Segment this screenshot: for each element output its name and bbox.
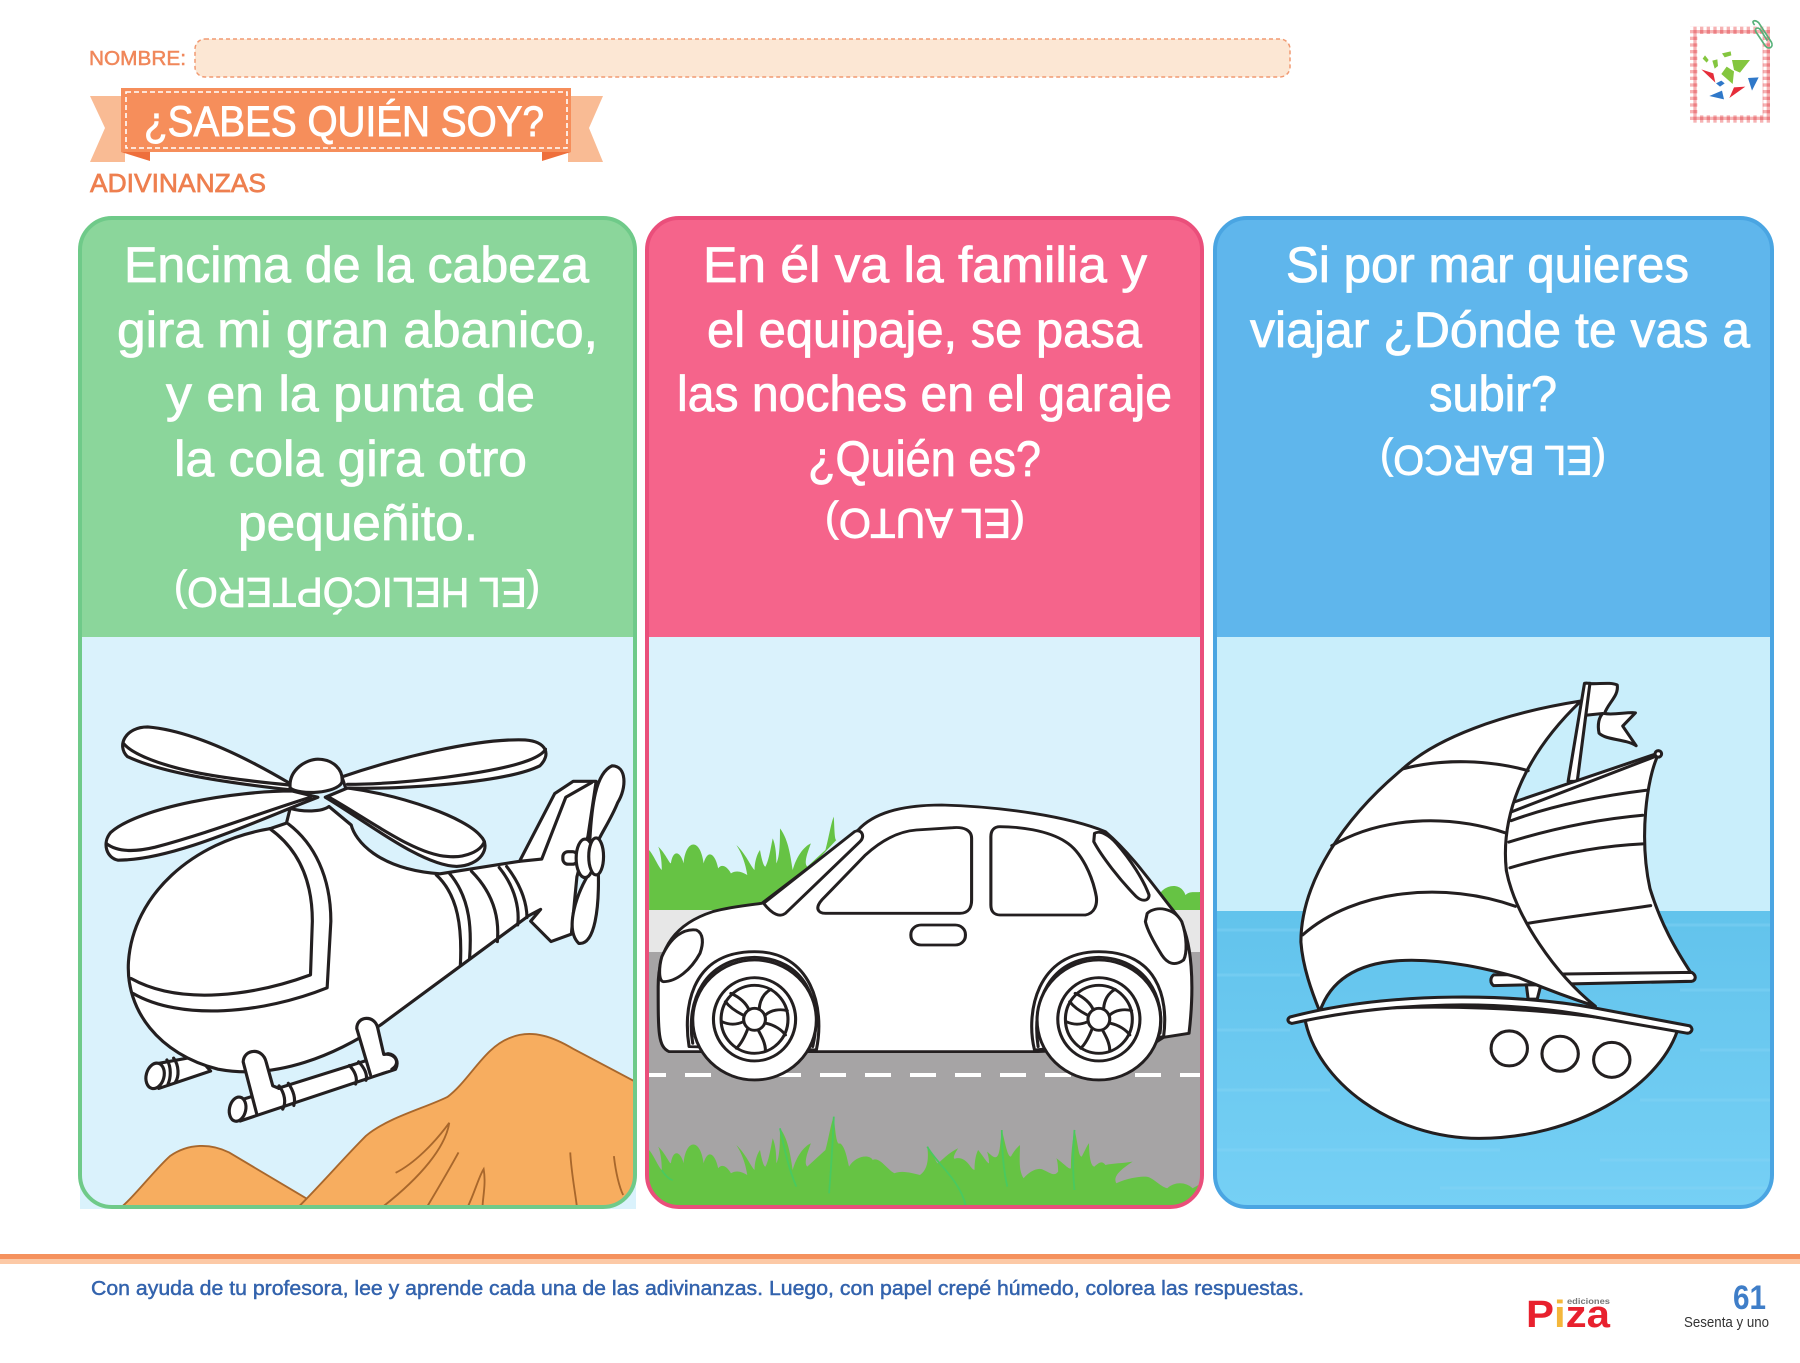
riddle text: y en la punta de (166, 366, 535, 422)
spar knob (1655, 751, 1662, 757)
riddle text: viajar ¿Dónde te vas a (1250, 302, 1750, 358)
boom (1491, 972, 1695, 986)
title banner: ¿SABES QUIÉN SOY? (144, 98, 544, 146)
background grass (649, 817, 836, 910)
front wheel (693, 960, 816, 1080)
riddle text: Si por mar quieres (1286, 237, 1689, 293)
boat drawing (1288, 683, 1695, 1138)
rear wheel (1037, 960, 1161, 1080)
rear arch (1032, 952, 1165, 1050)
tail bands (436, 866, 527, 966)
tail light (1145, 909, 1186, 964)
footer band (0, 1254, 1800, 1264)
panel border (647, 218, 1202, 1207)
panel border (1215, 218, 1772, 1207)
riddle text: las noches en el garaje (677, 366, 1172, 422)
panel border (80, 218, 635, 1207)
mountains (118, 1034, 636, 1210)
main rotor blades (106, 791, 318, 860)
fuselage and tail (128, 781, 596, 1072)
front arch (687, 952, 819, 1050)
page number: 61 (1733, 1279, 1766, 1317)
panel body (647, 218, 1202, 637)
sky and sea scene (1215, 637, 1772, 1211)
panel: helicopter riddle (80, 218, 636, 1210)
riddle text (117, 237, 598, 551)
riddle text: ¿Quién es? (808, 431, 1041, 487)
door handle (911, 925, 965, 945)
riddle text: el equipaje, se pasa (707, 302, 1142, 358)
panel: boat riddle (1215, 218, 1772, 1211)
icon: gingham frame with tangram (1694, 21, 1772, 119)
rotor hub (290, 759, 342, 792)
foreground grass (649, 1117, 1202, 1210)
riddle text: En él va la familia y (703, 237, 1147, 293)
riddle text: pequeñito. (238, 495, 478, 551)
mast (1568, 683, 1590, 781)
riddle text: la cola gira otro (174, 431, 527, 487)
headlight (660, 930, 702, 982)
publisher logo: Piza (1526, 1294, 1611, 1336)
upside-down answer: (EL HELICÓPTERO) (174, 569, 540, 616)
deck rail (1288, 997, 1692, 1033)
riddle text (1250, 237, 1750, 422)
publisher logo: ediciones (1567, 1297, 1611, 1306)
window frame (131, 829, 312, 995)
title banner (90, 88, 603, 162)
subtitle: ADIVINANZAS (90, 168, 266, 198)
rear pillar light (1094, 832, 1149, 900)
name input field (195, 39, 1290, 77)
rear skid (157, 1056, 211, 1088)
hull (1305, 1007, 1677, 1138)
front window (818, 827, 972, 913)
rear window (991, 827, 1097, 915)
flag (1585, 683, 1636, 746)
road scene (640, 637, 1205, 1212)
riddle text (677, 237, 1172, 487)
upside-down answer: (EL BARCO) (1380, 437, 1606, 484)
helicopter drawing (106, 727, 624, 1123)
portholes (1491, 1031, 1630, 1077)
sky background (80, 637, 636, 1209)
main sail (1301, 701, 1595, 1012)
riddle text: subir? (1429, 366, 1557, 422)
panel: car riddle (640, 218, 1205, 1212)
panel body (1215, 218, 1772, 637)
tail rotor (590, 766, 624, 847)
car drawing (658, 805, 1192, 1080)
riddle text: gira mi gran abanico, (117, 302, 598, 358)
landing skid (233, 1054, 397, 1121)
page number in words: Sesenta y uno (1684, 1314, 1769, 1331)
instructions: Con ayuda de tu profesora, lee y aprende cada una de las adivinanzas. Luego, con papel crepé húmedo, colorea las respuestas. (91, 1278, 1304, 1300)
panel body (80, 218, 635, 637)
riddle text: Encima de la cabeza (124, 237, 589, 293)
car body (658, 805, 1192, 1052)
windshield (764, 831, 863, 915)
back sail (1505, 753, 1692, 976)
upside-down answer: (EL AUTO) (825, 500, 1025, 547)
name label: NOMBRE: (89, 47, 186, 70)
